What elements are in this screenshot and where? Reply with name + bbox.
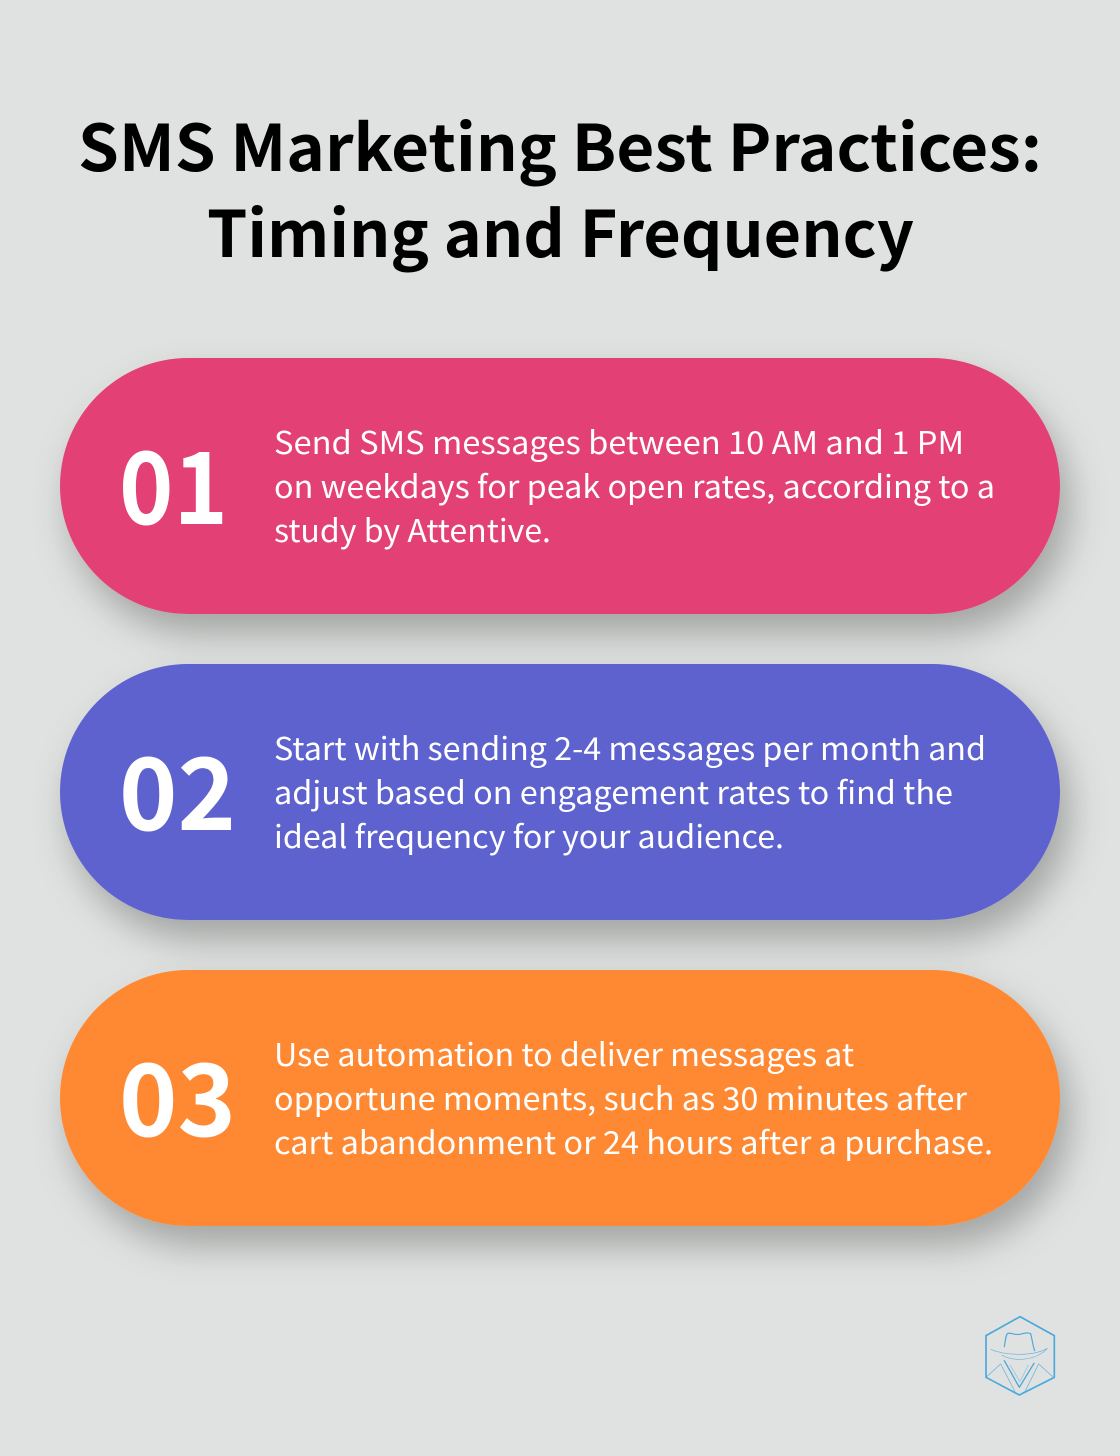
number 02: 02 xyxy=(119,714,236,859)
step 03 description xyxy=(274,1030,993,1164)
step 01 description xyxy=(274,418,995,552)
title: SMS Marketing Best Practices: xyxy=(78,98,1042,190)
step 03 description: opportune moments, such as 30 minutes after xyxy=(274,1074,968,1120)
step 03 description: Use automation to deliver messages at xyxy=(274,1030,854,1076)
step 01 description: study by Attentive. xyxy=(274,506,551,552)
number 03: 03 xyxy=(119,1020,236,1165)
panel: step 02 xyxy=(60,664,1060,920)
blue pill background xyxy=(60,664,1060,920)
title: Timing and Frequency xyxy=(207,184,914,276)
orange pill background xyxy=(60,970,1060,1226)
step 03 description: cart abandonment or 24 hours after a purchase. xyxy=(274,1118,993,1164)
step 02 description: ideal frequency for your audience. xyxy=(274,812,784,858)
panel: step 01 xyxy=(60,358,1060,614)
step 02 description: adjust based on engagement rates to find the xyxy=(274,768,953,814)
icon: spy logo in hexagon xyxy=(986,1317,1054,1395)
step 01 description: Send SMS messages between 10 AM and 1 PM xyxy=(274,418,964,464)
pink pill background xyxy=(60,358,1060,614)
title xyxy=(78,98,1042,276)
step 02 description: Start with sending 2-4 messages per month and xyxy=(274,724,986,770)
step 02 description xyxy=(274,724,986,858)
panel: step 03 xyxy=(60,970,1060,1226)
number 01: 01 xyxy=(119,408,228,553)
step 01 description: on weekdays for peak open rates, according to a xyxy=(274,462,995,508)
